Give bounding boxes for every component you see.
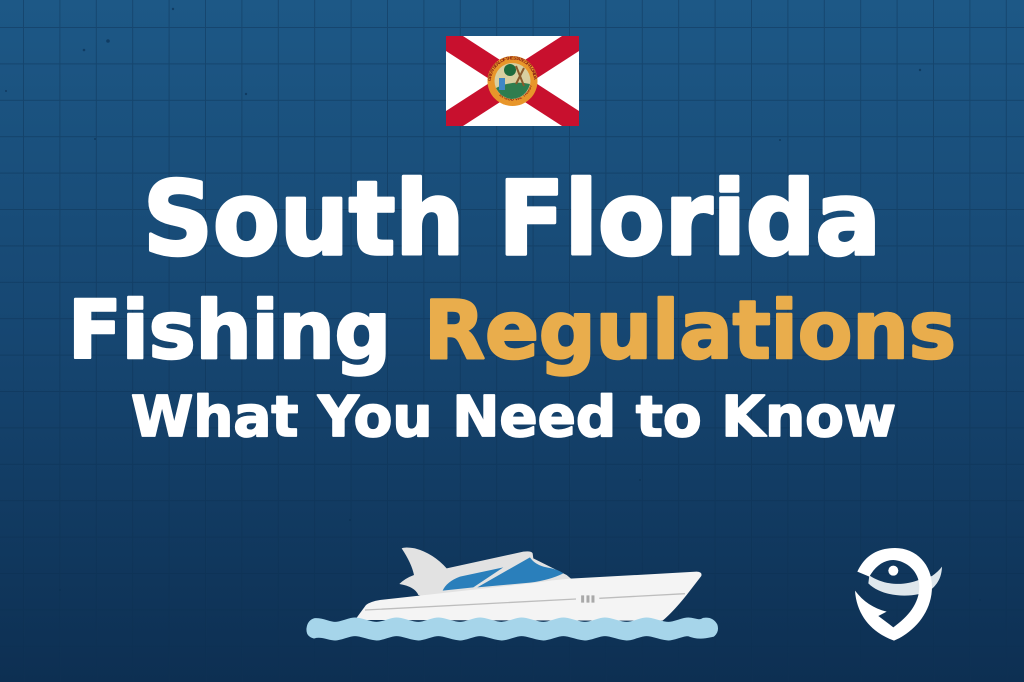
- water waves: [307, 618, 717, 640]
- hull stripe and vents: [365, 594, 685, 610]
- icon: Florida flag: GREAT SEAL OF THE STATE OF FLORIDA: [488, 56, 537, 81]
- icon: Florida flag: [446, 36, 579, 126]
- icon: boat on water: [307, 547, 717, 640]
- icon: fish hook logo: [855, 548, 942, 641]
- logo light band: [868, 567, 942, 596]
- title: South Florida: South Florida: [143, 160, 881, 279]
- boat cabin and fin: [399, 547, 577, 597]
- title: Fishing Regulations: [68, 284, 956, 377]
- title word: Fishing: Fishing: [68, 284, 391, 377]
- boat hull: [355, 572, 702, 621]
- subtitle: What You Need to Know: [131, 385, 896, 450]
- logo body: [855, 548, 932, 641]
- windshield windows: [443, 557, 563, 591]
- title word: Regulations: Regulations: [424, 284, 956, 377]
- icon: Florida flag: IN GOD WE TRUST: [499, 86, 532, 100]
- logo eye: [888, 566, 898, 576]
